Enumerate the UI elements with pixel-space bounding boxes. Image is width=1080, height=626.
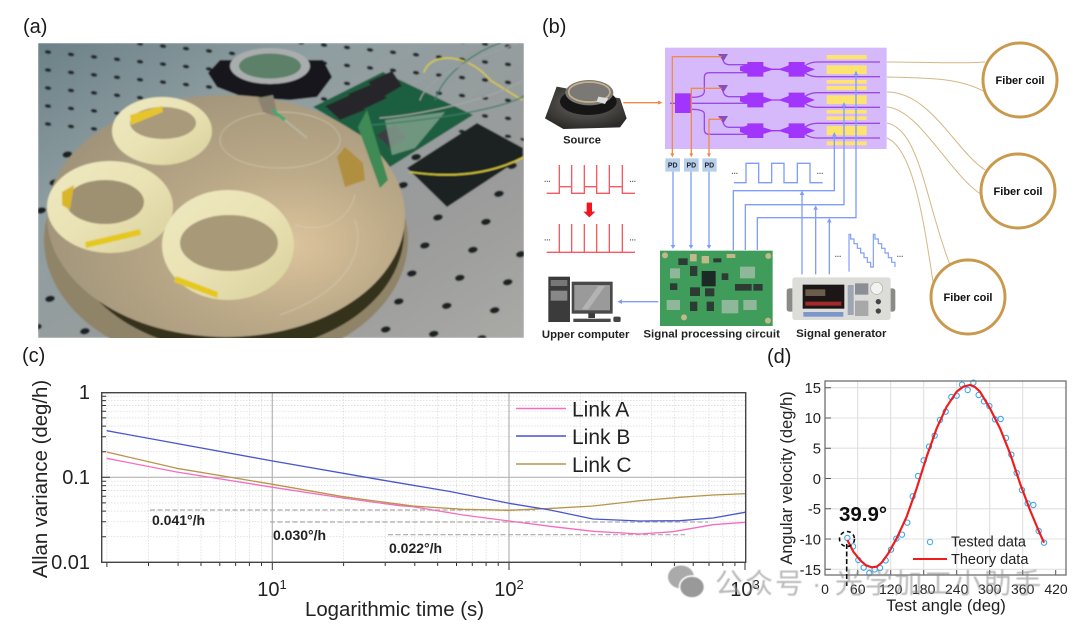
optical and electrical routing	[542, 57, 903, 341]
x tick labels: 420	[1044, 581, 1068, 597]
continuation dots: ...	[835, 250, 841, 259]
grid	[825, 381, 1066, 575]
PD detector 3: PD	[704, 162, 714, 169]
plot frame	[825, 381, 1066, 575]
fiber coil 2: Fiber coil	[994, 186, 1042, 198]
chip: grating couplers	[718, 54, 728, 123]
fiber leads from chip to coils	[887, 62, 985, 295]
x tick labels	[821, 581, 1068, 597]
y tick labels: -5	[808, 502, 821, 518]
photo: front ring	[162, 190, 294, 300]
blue signal lines	[621, 74, 856, 302]
plot frame	[102, 393, 746, 562]
Link A curve	[107, 458, 745, 534]
blue arrowheads	[617, 71, 858, 304]
panel label b: (b)	[542, 16, 566, 38]
legend: Link C	[572, 454, 632, 477]
legend	[516, 398, 632, 477]
signal generator label: Signal generator	[796, 328, 887, 340]
signal generator instrument	[787, 277, 895, 320]
red arrow	[583, 203, 595, 217]
photo: black sensor base	[208, 60, 332, 100]
PD detector 1: PD	[668, 162, 678, 169]
value labels: 0.041°/h	[152, 512, 205, 528]
photo: cables	[372, 43, 524, 175]
red pulse wave before	[547, 165, 635, 193]
legend: Link A	[572, 398, 629, 422]
y tick labels: 0.01	[51, 552, 90, 574]
highlight marker at 39.9 degrees	[840, 532, 854, 586]
square wave	[734, 163, 823, 183]
chart d: angular velocity	[778, 380, 1068, 615]
continuation dots: ...	[629, 175, 636, 184]
photo: green driver board	[313, 71, 473, 167]
y tick labels: 10	[805, 411, 821, 427]
fiber coil 1: Fiber coil	[996, 75, 1044, 87]
orange PD lines	[623, 57, 722, 154]
y tick labels: 5	[813, 442, 821, 458]
signal processing circuit label: Signal processing circuit	[643, 328, 780, 340]
value labels: 0.030°/h	[273, 527, 326, 543]
photo: gold laser module and vertical PCB	[337, 110, 388, 188]
photo: left ring	[47, 161, 173, 253]
photo: gold disc	[47, 95, 405, 337]
value labels	[152, 512, 442, 556]
watermark icon	[668, 566, 704, 598]
y tick labels: 15	[805, 381, 821, 397]
axis ticks	[825, 388, 1056, 575]
photo: top connector	[258, 95, 307, 138]
continuation dots: ...	[544, 175, 551, 184]
y axis title: Angular velocity (deg/h)	[778, 391, 796, 565]
ticks	[102, 396, 745, 570]
PD detector 2	[684, 158, 699, 172]
continuation dots: ...	[731, 167, 738, 176]
PD detector 3	[702, 158, 717, 172]
x tick labels: 3	[753, 577, 760, 592]
watermark text: ·	[812, 568, 821, 599]
y tick labels: -15	[800, 563, 821, 579]
continuation dots: ...	[544, 234, 551, 243]
watermark text: 公众号	[715, 568, 805, 599]
minor grid	[102, 393, 745, 562]
x tick labels: 60	[850, 581, 866, 597]
fiber coil 3: Fiber coil	[944, 292, 992, 304]
panel label d: (d)	[767, 346, 791, 368]
x tick labels: 10	[257, 579, 280, 601]
watermark text: 光学加工小助手	[835, 568, 1043, 599]
continuation dots: ...	[817, 167, 823, 176]
chip: yellow electrodes	[827, 55, 867, 145]
x axis title: Logarithmic time (s)	[305, 599, 484, 621]
x tick labels: 360	[1011, 581, 1035, 597]
source label: Source	[563, 134, 601, 146]
y tick labels: 1	[79, 382, 90, 404]
x tick labels: 2	[517, 577, 524, 592]
Link C curve	[107, 452, 745, 510]
continuation dots: ...	[897, 250, 903, 259]
photo: fine fibers on disc	[220, 112, 358, 315]
value labels: 0.022°/h	[389, 540, 442, 556]
39.9 degree label: 39.9°	[839, 503, 887, 526]
PD detector 2: PD	[686, 162, 696, 169]
x tick labels: 10	[730, 579, 753, 601]
photo: sensor ring	[230, 48, 310, 84]
x tick labels: 300	[978, 581, 1002, 597]
legend: Tested data	[951, 534, 1027, 550]
y tick labels: 0	[813, 472, 821, 488]
signal processing circuit board	[660, 251, 773, 326]
Link B curve	[107, 431, 745, 521]
y tick labels: -10	[800, 532, 821, 548]
chip: modulator blocks	[675, 62, 815, 138]
x tick labels: 180	[912, 581, 936, 597]
sawtooth staircase wave	[849, 234, 895, 272]
x tick labels: 10	[494, 579, 517, 601]
photo: lower metal plate	[44, 218, 408, 338]
y tick labels	[51, 382, 90, 574]
x tick labels: 1	[280, 577, 287, 592]
photonic chip	[665, 48, 887, 149]
panel a: photograph of the fiber coil setup	[38, 43, 524, 368]
panel label c: (c)	[22, 345, 45, 367]
tested data points	[845, 380, 1047, 576]
upper computer icon	[548, 277, 621, 322]
upper computer label: Upper computer	[542, 329, 630, 341]
x tick labels: 240	[945, 581, 969, 597]
legend: Link B	[572, 426, 630, 449]
legend	[913, 534, 1029, 568]
PD detector 1	[665, 158, 680, 172]
x axis title: Test angle (deg)	[886, 596, 1006, 615]
photo: black slab	[407, 123, 523, 207]
fiber coil 2	[981, 154, 1055, 228]
chart c: Allan variance	[30, 380, 760, 621]
fiber coil 1	[983, 43, 1057, 117]
photo: upper-left ring	[112, 97, 212, 165]
dashed level lines	[150, 510, 708, 535]
legend: Theory data	[951, 552, 1029, 568]
panel label a: (a)	[23, 16, 47, 38]
red pulse wave after	[547, 224, 635, 252]
y tick labels	[800, 381, 821, 579]
continuation dots	[544, 167, 903, 259]
fiber coil 3	[931, 260, 1005, 334]
y tick labels: 0.1	[62, 467, 90, 489]
chip: waveguides	[670, 58, 880, 138]
continuation dots: ...	[629, 234, 636, 243]
x tick labels: 0	[821, 581, 829, 597]
source device	[545, 80, 627, 129]
theory curve	[847, 385, 1044, 567]
x tick labels: 120	[879, 581, 903, 597]
orange arrowheads	[658, 101, 711, 157]
x tick labels	[257, 577, 760, 601]
y axis title: Allan variance (deg/h)	[30, 380, 52, 578]
